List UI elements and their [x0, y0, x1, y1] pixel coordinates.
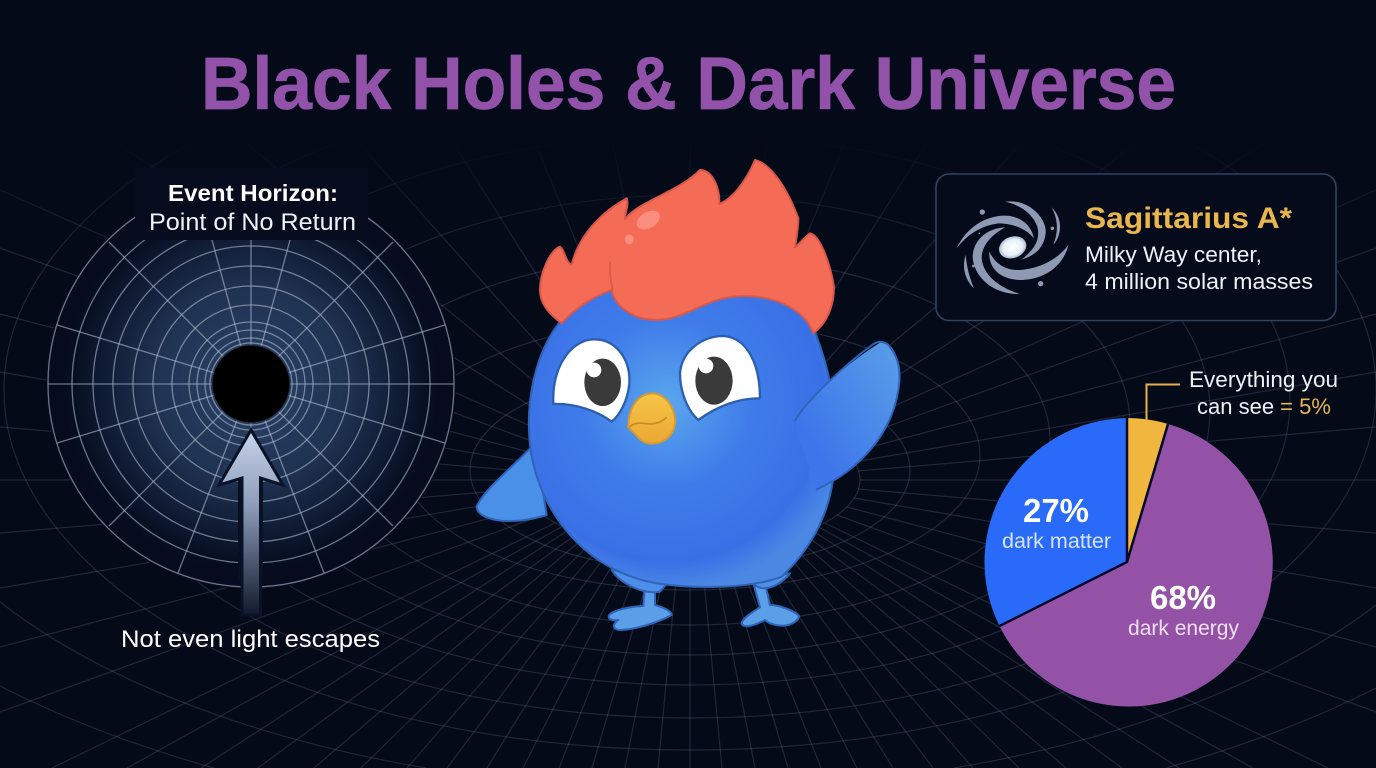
thighs: [612, 570, 790, 592]
arrow gap: [238, 480, 263, 580]
right wing: [795, 342, 899, 489]
left pupil: [584, 359, 621, 406]
caption: Not even light escapes: [121, 626, 380, 653]
label mask: [135, 168, 368, 240]
flame hair: [540, 160, 834, 333]
body: [529, 270, 834, 587]
card title: Sagittarius A*: [1085, 202, 1292, 235]
right wing outline: [795, 342, 900, 489]
event horizon subheading: Point of No Return: [149, 209, 356, 236]
icon: spiral galaxy: [957, 201, 1068, 294]
arrow: light pulled in: [219, 430, 283, 615]
right pupil: [695, 357, 733, 405]
leader label: can see = 5%: [1197, 394, 1331, 419]
left eye: [553, 339, 629, 422]
card frame: [936, 174, 1336, 320]
title: Black Holes & Dark Universe: [201, 42, 1176, 125]
well backdrop: [46, 179, 456, 589]
beak: [628, 393, 675, 444]
dark matter label: dark matter: [1002, 530, 1111, 553]
event horizon heading: Event Horizon:: [168, 180, 338, 206]
card line 1: Milky Way center,: [1085, 242, 1262, 267]
panel: Sagittarius A* card: [936, 174, 1336, 320]
slice: dark energy 68%: [1000, 424, 1273, 707]
black hole: [212, 345, 290, 423]
hair fold: [610, 262, 613, 290]
leader line: [1146, 384, 1180, 420]
right eye glint: [699, 359, 713, 373]
dark energy value: 68%: [1150, 579, 1216, 616]
warped grid rings: [48, 181, 454, 587]
pie chart: composition of the universe: [984, 367, 1338, 707]
left eye glint: [587, 363, 601, 377]
slice: visible 5%: [1127, 418, 1168, 562]
slice separators: [1000, 418, 1168, 626]
hair highlights: [625, 207, 663, 244]
radial glow: [61, 194, 441, 574]
leader label: Everything you: [1189, 367, 1338, 392]
left wing: [477, 443, 547, 521]
slice: dark matter 27%: [984, 418, 1128, 626]
beak smile: [629, 417, 667, 427]
panel: event horizon diagram: [46, 168, 456, 653]
mascot: blue bird: [477, 160, 900, 630]
dark energy label: dark energy: [1128, 617, 1239, 640]
left foot: [609, 583, 672, 630]
right foot: [742, 583, 799, 626]
card line 2: 4 million solar masses: [1085, 269, 1313, 294]
right eye: [680, 336, 760, 420]
dark matter value: 27%: [1023, 492, 1089, 529]
